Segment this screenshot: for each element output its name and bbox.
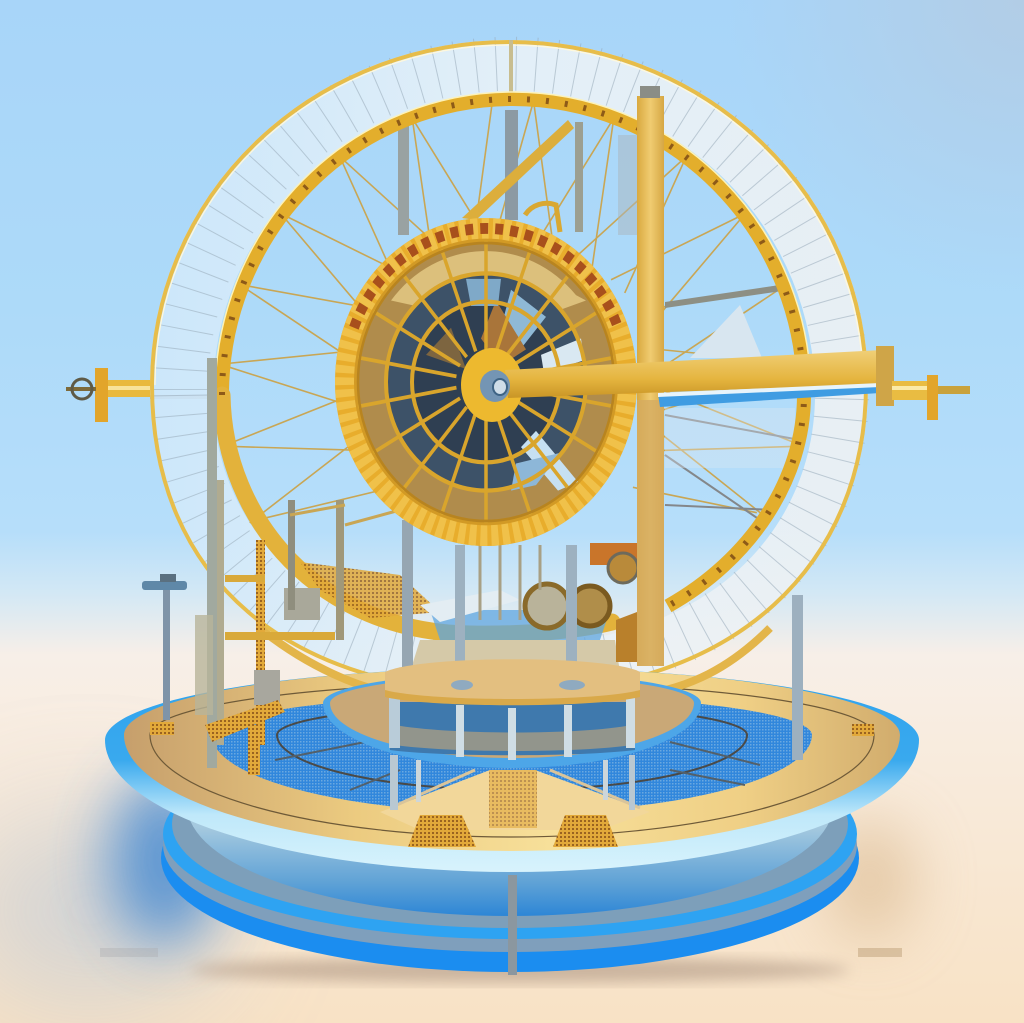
base support pole xyxy=(508,875,517,975)
left scaffold tower xyxy=(195,358,335,775)
hub bolt xyxy=(480,370,510,402)
horizontal arm xyxy=(505,346,894,407)
inner gold ring xyxy=(215,92,811,634)
large outer ring xyxy=(150,40,868,695)
lamp post xyxy=(142,574,187,735)
right axle xyxy=(892,375,970,420)
lower machinery xyxy=(284,500,638,680)
faint mark right xyxy=(858,948,902,957)
outer ring front sweep xyxy=(262,628,770,695)
inner pit xyxy=(212,695,812,847)
drum base xyxy=(161,694,859,972)
right post xyxy=(792,595,874,760)
platform deck xyxy=(124,668,900,851)
platform rim xyxy=(105,668,919,872)
central raised platform xyxy=(323,659,701,768)
vertical beam xyxy=(637,86,664,666)
left axle xyxy=(66,368,215,422)
upper frame struts xyxy=(398,40,800,520)
gear hub xyxy=(335,218,637,546)
faint mark left xyxy=(100,948,158,957)
wheel spokes xyxy=(220,103,806,555)
ground shadow xyxy=(0,775,915,1000)
